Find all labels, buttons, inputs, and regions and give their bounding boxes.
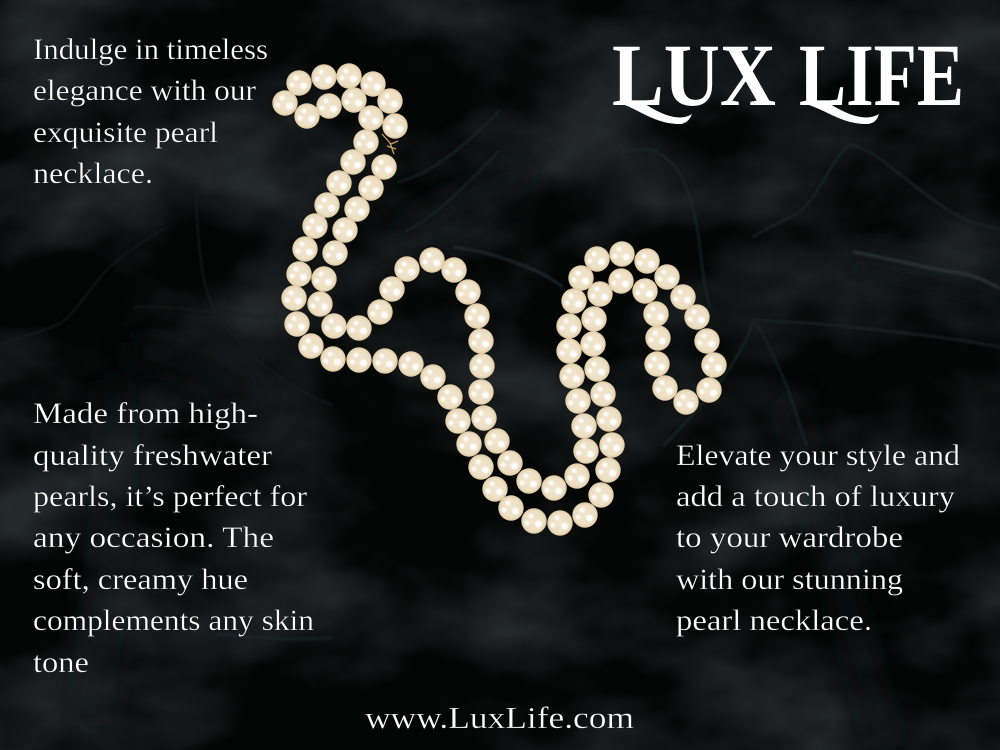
- text block: style call to action: Elevate your style and: [676, 439, 960, 472]
- text block: style call to action: add a touch of luxury: [676, 480, 955, 513]
- title: LUX LIFE: [612, 27, 964, 125]
- text block: materials: tone: [33, 646, 89, 679]
- text block: intro: Indulge in timeless: [33, 33, 268, 66]
- text block: style call to action: to your wardrobe: [676, 521, 903, 554]
- text block: materials: pearls, it’s perfect for: [33, 480, 307, 513]
- text block: materials: complements any skin: [33, 604, 314, 637]
- footer: website: www.LuxLife.com: [365, 700, 634, 735]
- text block: materials: soft, creamy hue: [33, 563, 248, 596]
- title: LUX LIFE: LUX: [612, 27, 776, 125]
- icon: gold clasp: [382, 134, 398, 154]
- text block: intro: exquisite pearl: [33, 116, 218, 149]
- pearl necklace: [272, 63, 727, 536]
- text block: style call to action: pearl necklace.: [676, 604, 872, 637]
- text block: intro: necklace.: [33, 157, 153, 190]
- text block: materials: any occasion. The: [33, 521, 274, 554]
- text block: intro: elegance with our: [33, 74, 256, 107]
- text block: materials: [33, 397, 314, 679]
- text block: materials: Made from high-: [33, 397, 258, 430]
- text block: materials: quality freshwater: [33, 439, 272, 472]
- text block: style call to action: [676, 439, 960, 637]
- text block: style call to action: with our stunning: [676, 563, 903, 596]
- text block: intro: [33, 33, 268, 190]
